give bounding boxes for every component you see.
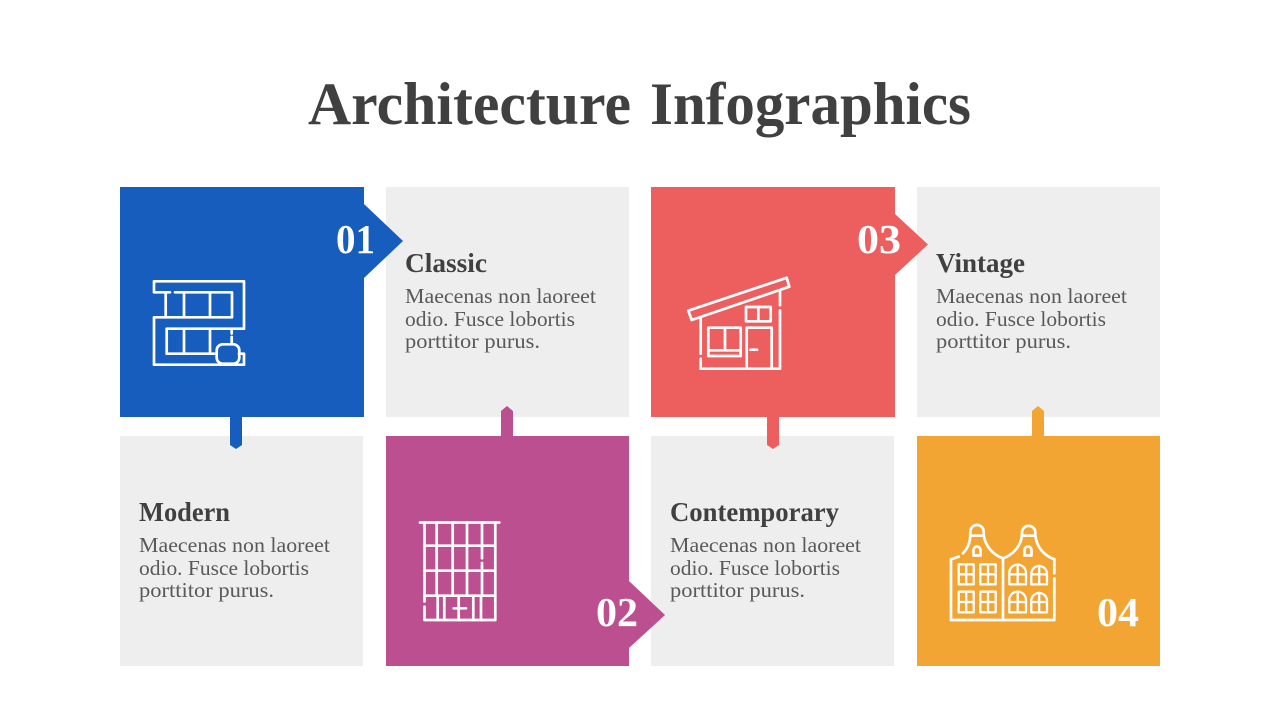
text block: Modern description: Maecenas non laoreet xyxy=(139,533,330,557)
panel: step 01 blue xyxy=(120,187,403,449)
panel: Contemporary text card xyxy=(651,436,894,666)
text block: Modern description: odio. Fusce lobortis xyxy=(139,556,309,580)
text block: Vintage description: odio. Fusce lobortis xyxy=(936,307,1106,331)
panel: Vintage text card xyxy=(917,187,1160,417)
text block: Contemporary description xyxy=(670,533,861,602)
heading: Classic: Classic xyxy=(405,248,487,278)
number 01: 01 xyxy=(336,216,375,262)
number 04: 04 xyxy=(1097,589,1139,635)
text block: Classic description: Maecenas non laoreet xyxy=(405,284,596,308)
text block: Classic description: porttitor purus. xyxy=(405,329,540,353)
title: Infographics xyxy=(650,71,971,137)
panel: step 03 red xyxy=(651,187,928,449)
icon: shed-roof house xyxy=(688,278,789,369)
text block: Vintage description: Maecenas non laoreet xyxy=(936,284,1127,308)
panel: Classic text card xyxy=(386,187,629,417)
text block: Modern description: porttitor purus. xyxy=(139,578,274,602)
icon detail: townhouse windows xyxy=(959,564,1047,612)
text block: Modern description xyxy=(139,533,330,602)
icon: office tower grid xyxy=(420,522,499,620)
number 02: 02 xyxy=(596,589,638,635)
text block: Classic description xyxy=(405,284,596,353)
panel: Modern text card xyxy=(120,436,363,666)
icon: modern building plan xyxy=(154,281,244,365)
panel: step 02 purple xyxy=(386,406,665,666)
panel: step 04 orange xyxy=(917,406,1160,666)
heading: Modern: Modern xyxy=(139,497,230,527)
text block: Contemporary description: Maecenas non laoreet xyxy=(670,533,861,557)
text block: Classic description: odio. Fusce lobortis xyxy=(405,307,575,331)
heading: Vintage: Vintage xyxy=(936,248,1025,278)
heading: Contemporary: Contemporary xyxy=(670,497,839,527)
text block: Vintage description xyxy=(936,284,1127,353)
text block: Contemporary description: odio. Fusce lobortis xyxy=(670,556,840,580)
title xyxy=(308,71,971,137)
icon: gabled townhouses xyxy=(951,525,1054,620)
text block: Vintage description: porttitor purus. xyxy=(936,329,1071,353)
title: Architecture xyxy=(308,71,631,137)
number 03: 03 xyxy=(857,216,901,262)
text block: Contemporary description: porttitor purus. xyxy=(670,578,805,602)
